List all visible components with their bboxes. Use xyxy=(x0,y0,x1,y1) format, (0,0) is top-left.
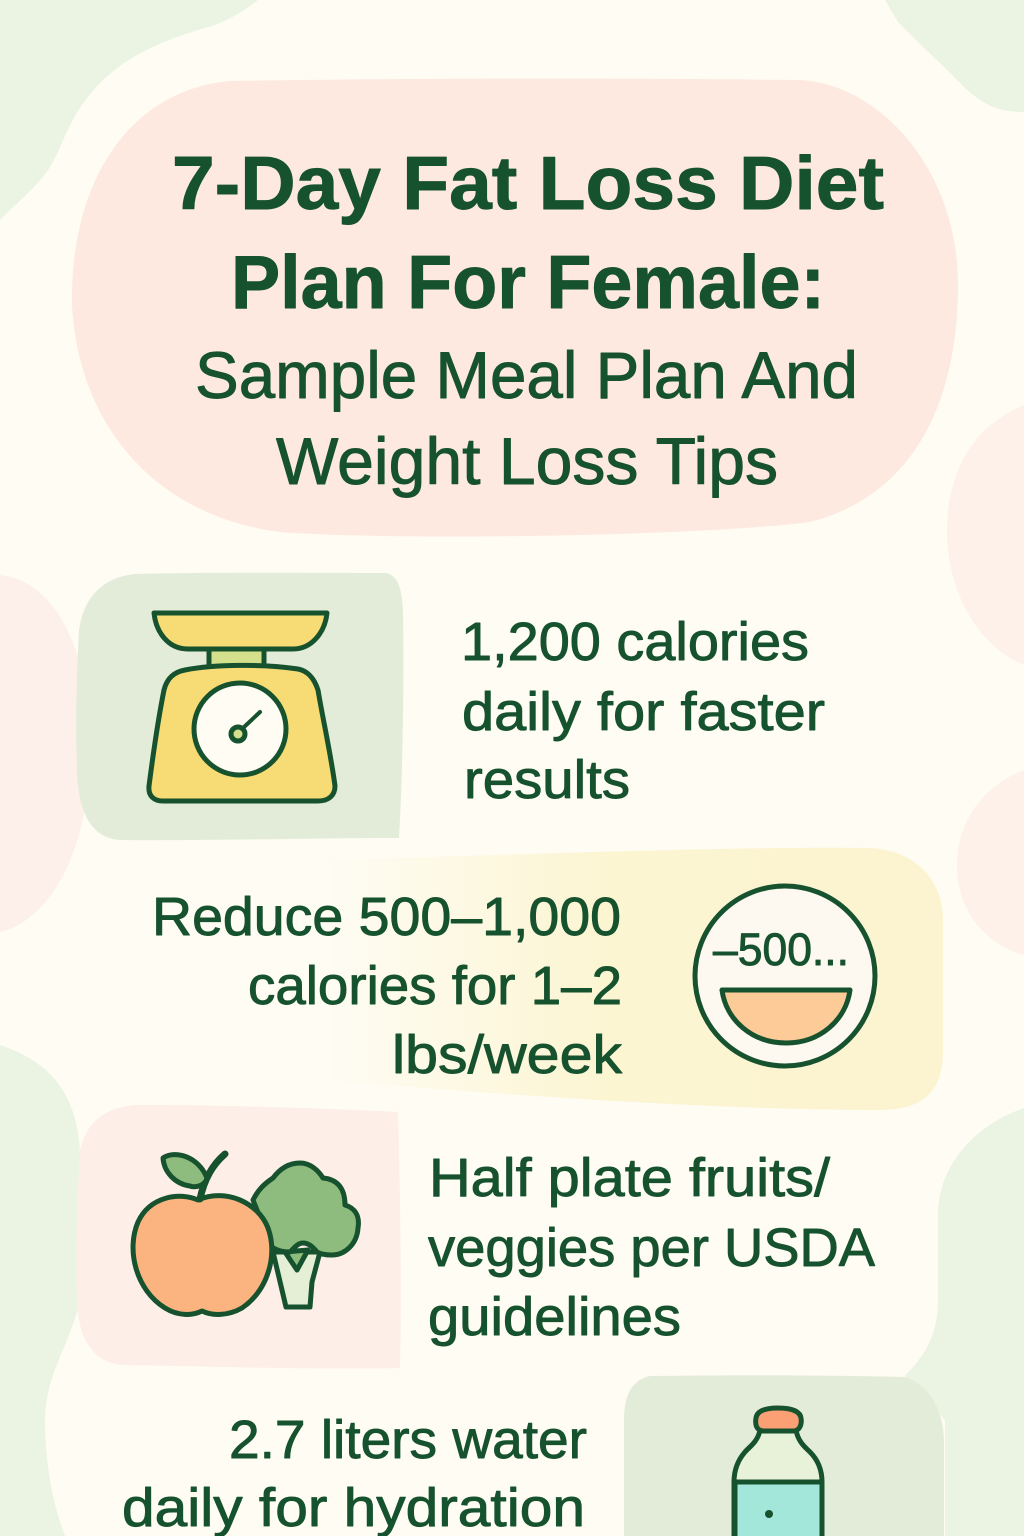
text: reduce calories: calories for 1–2 xyxy=(248,956,622,1016)
subtitle: Sample Meal Plan And xyxy=(195,338,858,412)
panel: title background xyxy=(72,79,958,537)
subtitle: Weight Loss Tips xyxy=(276,424,778,498)
text: reduce calories: Reduce 500–1,000 xyxy=(152,887,621,947)
text: fruits and veggies xyxy=(428,1148,875,1347)
title xyxy=(172,141,884,324)
panel: water xyxy=(122,1375,944,1536)
panel: reduce calories xyxy=(152,848,943,1110)
text: calories: 1,200 calories xyxy=(461,612,809,672)
title: Plan For Female: xyxy=(231,240,825,324)
panel: fruits and veggies xyxy=(76,1105,875,1369)
text: calories xyxy=(461,612,825,810)
text: fruits and veggies: veggies per USDA xyxy=(428,1218,875,1278)
icon: minus 500 bowl: –500... xyxy=(713,924,849,975)
title: 7-Day Fat Loss Diet xyxy=(172,141,884,225)
text: reduce calories xyxy=(152,887,623,1085)
text: fruits and veggies: Half plate fruits/ xyxy=(429,1148,830,1208)
text: reduce calories: lbs/week xyxy=(392,1025,623,1085)
icon: minus 500 bowl xyxy=(695,886,875,1066)
text: water: 2.7 liters water xyxy=(229,1410,587,1470)
subtitle xyxy=(195,338,858,498)
icon: apple and broccoli xyxy=(133,1154,358,1314)
text: water xyxy=(122,1410,587,1536)
icon: water bottle xyxy=(734,1408,822,1536)
text: fruits and veggies: guidelines xyxy=(428,1287,681,1347)
text: calories: daily for faster xyxy=(462,682,825,742)
icon: kitchen scale xyxy=(149,613,335,801)
text: calories: results xyxy=(464,750,630,810)
panel: calories xyxy=(76,573,825,840)
